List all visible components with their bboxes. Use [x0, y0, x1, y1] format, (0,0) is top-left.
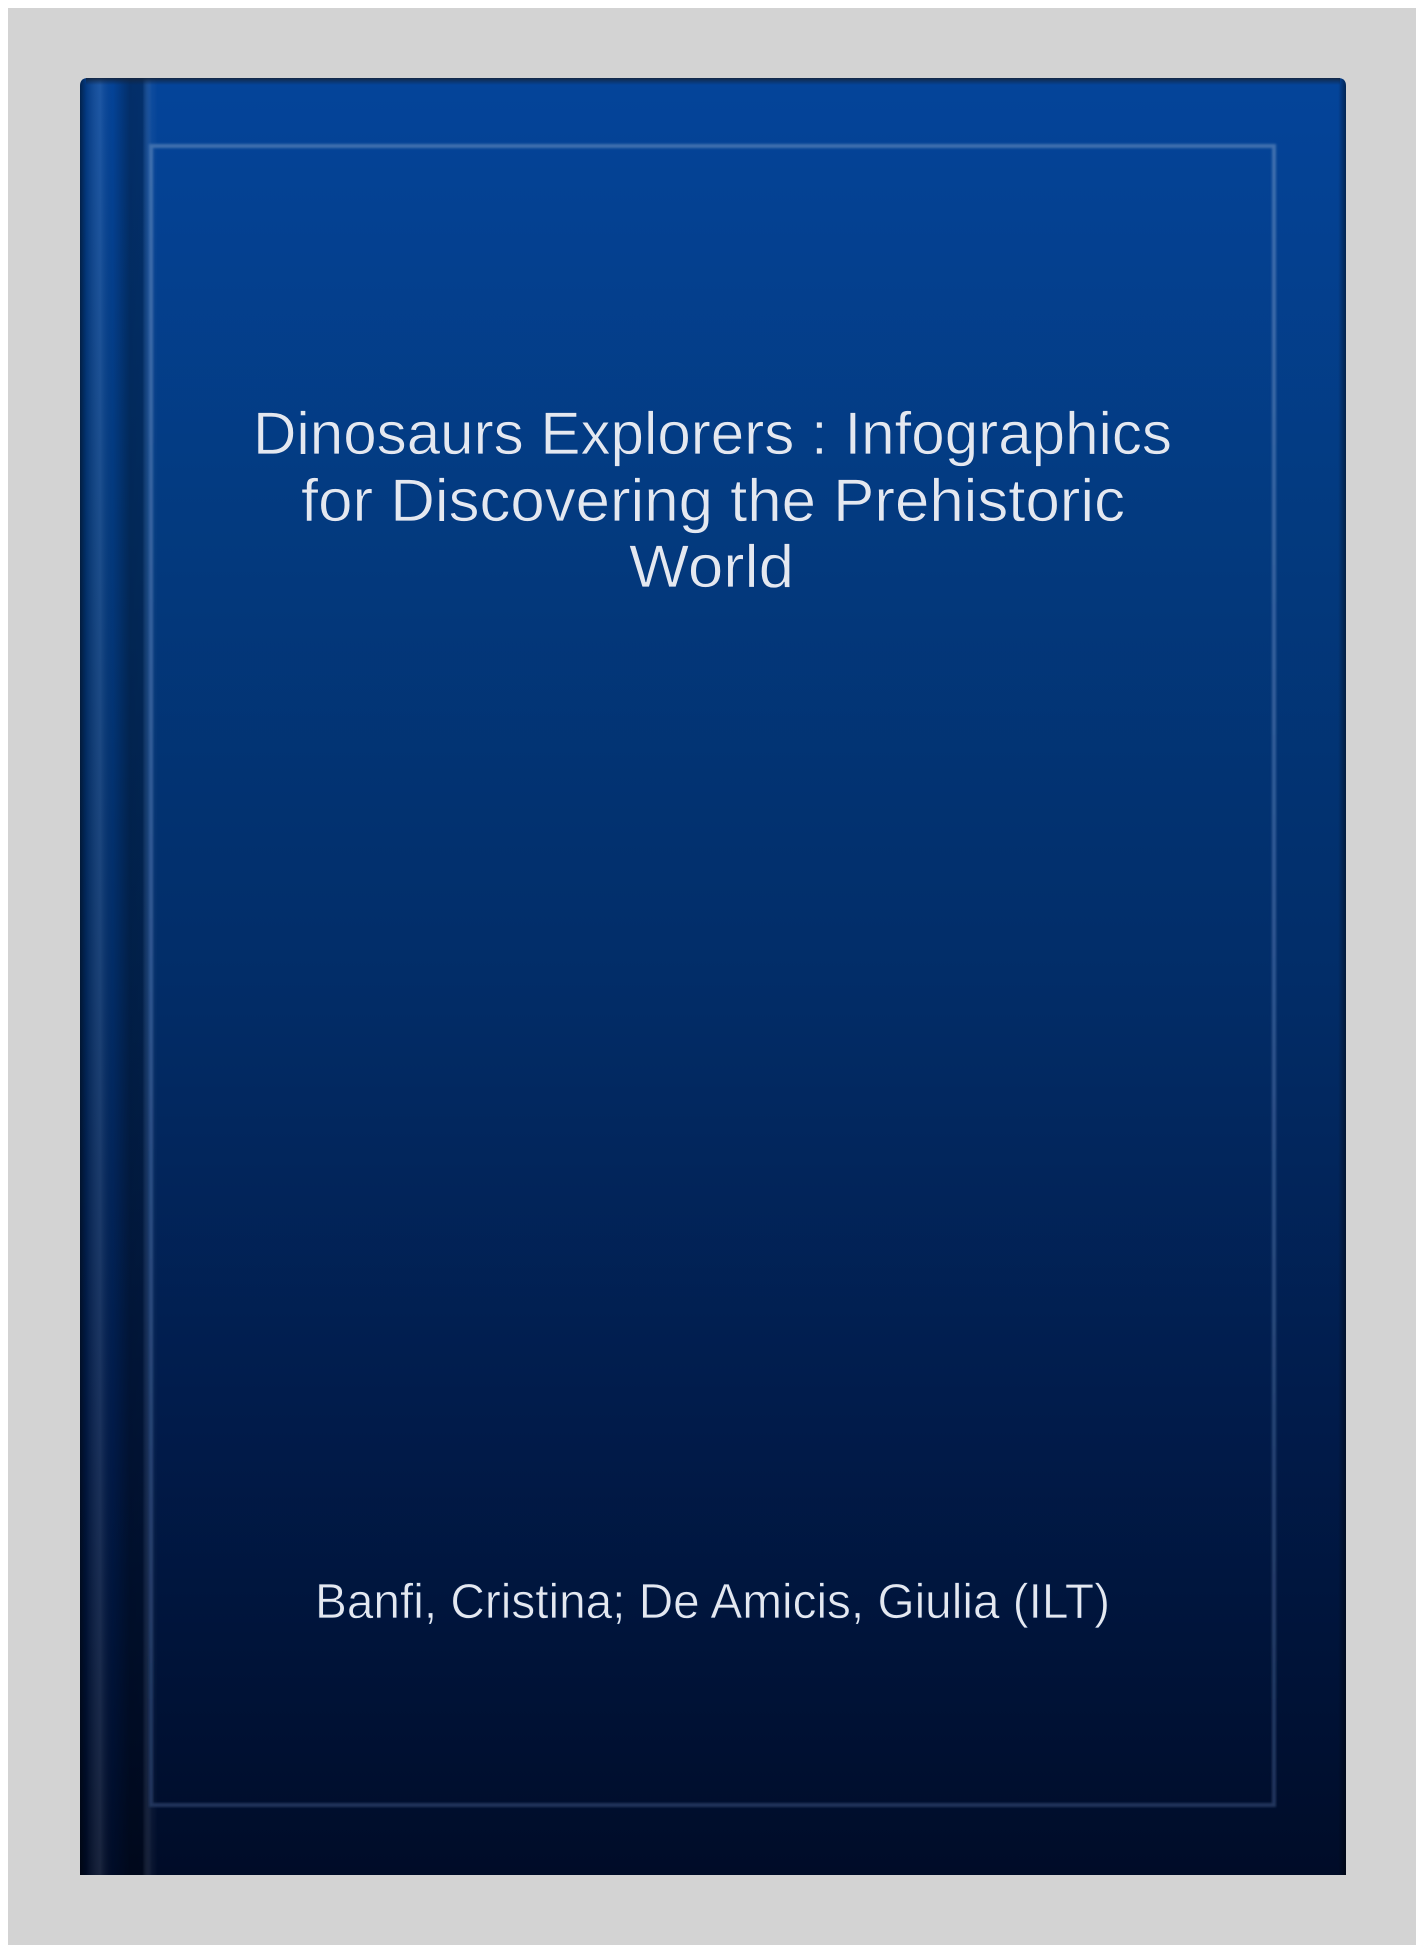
spine shading: [80, 78, 158, 1875]
title: World: [629, 533, 794, 600]
title: [253, 400, 1172, 600]
inner frame: [151, 146, 1274, 1805]
title: for Discovering the Prehistoric: [301, 467, 1125, 534]
top edge shadow: [86, 78, 1340, 85]
title: Dinosaurs Explorers : Infographics: [253, 400, 1172, 467]
author: Banfi, Cristina; De Amicis, Giulia (ILT): [315, 1575, 1110, 1629]
right edge shading: [1290, 78, 1346, 1875]
